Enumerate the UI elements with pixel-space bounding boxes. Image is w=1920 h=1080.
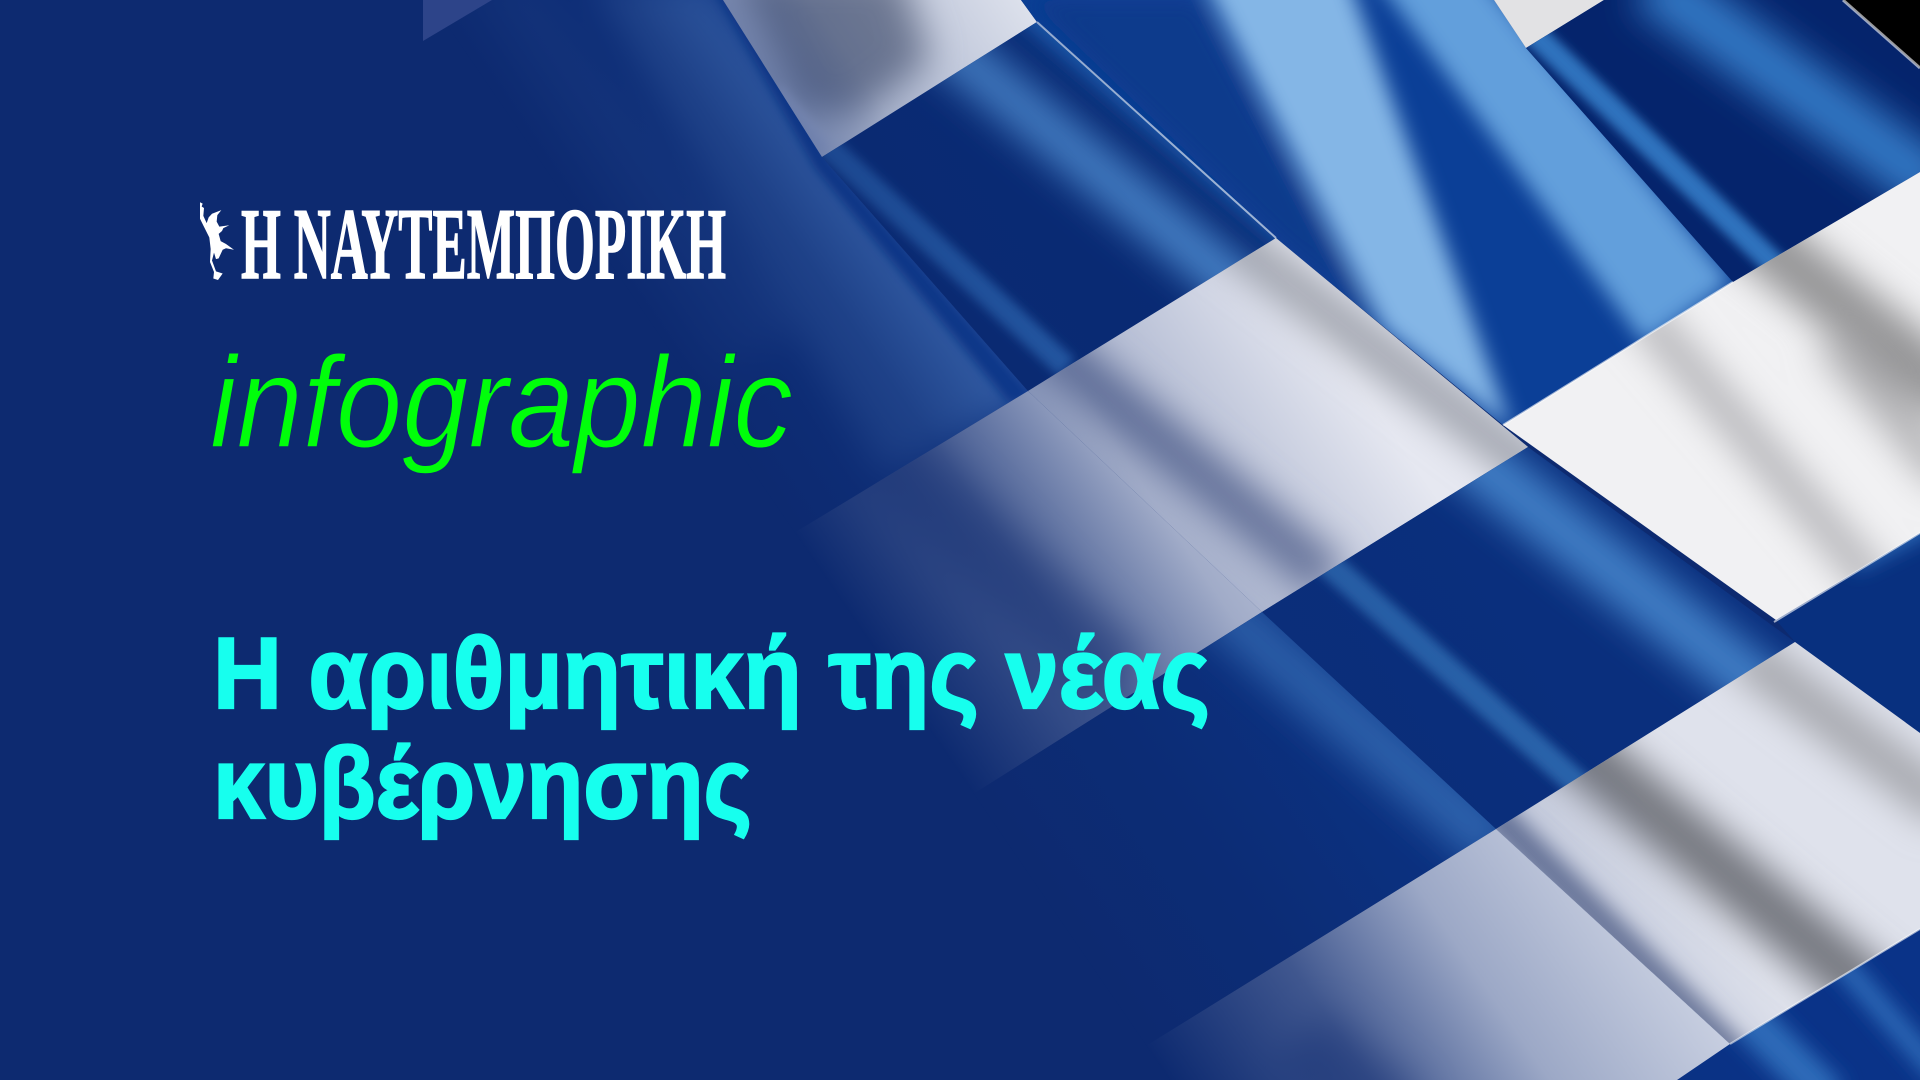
flag: top-right dark blue panel <box>1520 0 1920 290</box>
logo wordmark: Η ΝΑΥΤΕΜΠΟΡΙΚΗ <box>241 188 726 301</box>
flag: lower white band, faded section <box>1170 829 1730 1080</box>
flag: top-left white stripe <box>720 0 1040 160</box>
title line 2: κυβέρνησης <box>213 728 752 840</box>
flag: right white band <box>1500 170 1920 625</box>
flag: black corner <box>1843 0 1920 68</box>
flag: upper blue panel <box>822 22 1276 391</box>
label: infographic: infographic <box>210 329 793 475</box>
logo: Η ΝΑΥΤΕΜΠΟΡΙΚΗ <box>200 188 726 301</box>
flag: lower central blue panel <box>1260 440 1800 835</box>
flag: top-right white corner <box>1494 0 1604 48</box>
flag: light blue folds <box>1020 0 1740 430</box>
left solid panel <box>0 0 1170 1080</box>
flag photograph <box>521 0 1920 1080</box>
faint fold wedge at top edge <box>423 0 492 41</box>
flag: small blue panel right <box>1776 533 1920 732</box>
flag: central white band, faded section <box>818 391 1262 780</box>
flag: lower white band <box>1490 640 1920 1060</box>
flag: bottom-right blue panel <box>1670 925 1920 1080</box>
icon: Hermes figure <box>200 202 234 280</box>
flag: left blue folds <box>528 0 1028 478</box>
flag: lower left blue panel <box>1060 612 1496 936</box>
title: main heading <box>213 618 1210 840</box>
title line 1: Η αριθμητική της νέας <box>213 618 1210 730</box>
flag: central white band <box>1028 238 1528 612</box>
flag: seam highlights <box>1037 0 1920 1044</box>
